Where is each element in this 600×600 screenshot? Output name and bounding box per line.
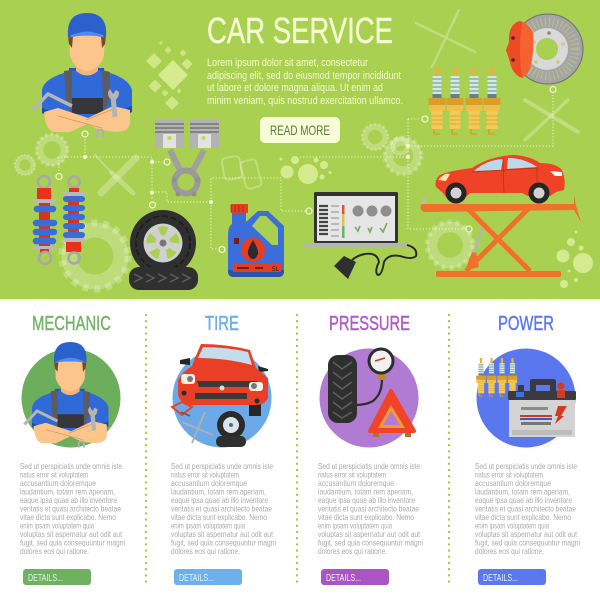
circle icon: mechanic — [22, 342, 120, 448]
button: tire details: DETAILS... — [179, 572, 214, 584]
text: mechanic: enim ipsam voluptatem quia — [20, 520, 94, 530]
heading: power: POWER — [498, 313, 554, 335]
text: power: vitae dicta sunt explicabo. Nemo — [475, 512, 571, 522]
text: pressure — [318, 461, 423, 556]
text: tire: eaque ipsa quae ab illo inventore — [171, 495, 268, 505]
title: CAR SERVICE — [207, 10, 393, 51]
button: tire details — [174, 569, 242, 585]
text: tire: dolores eos qui ratione. — [171, 546, 240, 556]
text: pressure: voluptas sit aspernatur aut odit aut — [318, 529, 421, 539]
text: power: eaque ipsa quae ab illo inventore — [475, 495, 572, 505]
intro text: ut labore et dolore magna aliqua. Ut enim ad — [207, 82, 383, 94]
circle icon: tire — [172, 344, 272, 448]
text: power: accusantium doloremque — [475, 478, 551, 488]
icon: scissor lift — [420, 195, 581, 277]
decorative diamonds — [146, 41, 192, 110]
text: power: natus error sit voluptatem — [475, 470, 543, 480]
text: mechanic: natus error sit voluptatem — [20, 470, 88, 480]
separators — [146, 315, 449, 587]
text: pressure: accusantium doloremque — [318, 478, 394, 488]
icon: oil canister: 5L — [272, 266, 280, 273]
text: mechanic: dolores eos qui ratione. — [20, 546, 89, 556]
text: mechanic: vitae dicta sunt explicabo. Nemo — [20, 512, 116, 522]
heading: tire: TIRE — [205, 313, 239, 335]
text: mechanic: laudantium, totam rem aperiam, — [20, 486, 115, 496]
faint tool silhouettes — [95, 10, 578, 193]
text: power: laudantium, totam rem aperiam, — [475, 486, 570, 496]
button: mechanic details: DETAILS... — [28, 572, 63, 584]
panel: mechanic — [20, 313, 125, 585]
panel: pressure — [318, 313, 423, 585]
text: pressure: veritatis et quasi architecto beatae — [318, 504, 419, 514]
circle icon: power — [476, 348, 576, 448]
text: tire: enim ipsam voluptatem quia — [171, 520, 245, 530]
text: tire: vitae dicta sunt explicabo. Nemo — [171, 512, 267, 522]
text: tire — [171, 461, 276, 556]
button: pressure details — [321, 569, 389, 585]
text: tire: accusantium doloremque — [171, 478, 247, 488]
decorative gears — [15, 124, 473, 289]
button: power details: DETAILS... — [483, 572, 518, 584]
text: mechanic: accusantium doloremque — [20, 478, 96, 488]
icon: wheel and tyre — [129, 210, 198, 290]
text: mechanic: eaque ipsa quae ab illo inventore — [20, 495, 117, 505]
text: mechanic: voluptas sit aspernatur aut odit aut — [20, 529, 123, 539]
text: tire: voluptas sit aspernatur aut odit aut — [171, 529, 274, 539]
text: power: veritatis et quasi architecto beatae — [475, 504, 576, 514]
text: pressure: fugit, sed quia consequuntur magni — [318, 538, 423, 548]
text: tire: Sed ut perspiciatis unde omnis iste — [171, 461, 273, 471]
text: mechanic: veritatis et quasi architecto beatae — [20, 504, 121, 514]
icon: mechanic — [33, 13, 132, 137]
text: mechanic: Sed ut perspiciatis unde omnis iste — [20, 461, 122, 471]
text: power: enim ipsam voluptatem quia — [475, 520, 549, 530]
icon: brake disc — [506, 14, 583, 84]
button: pressure details: DETAILS... — [326, 572, 361, 584]
panel: tire — [171, 313, 276, 585]
intro text: adipiscing elit, sed do eiusmod tempor incididunt — [207, 70, 401, 82]
text: pressure: vitae dicta sunt explicabo. Nemo — [318, 512, 414, 522]
connector lines — [56, 86, 556, 252]
icon: oil canister — [228, 204, 284, 277]
button: mechanic details — [23, 569, 91, 585]
text: power — [475, 461, 580, 556]
text: pressure: Sed ut perspiciatis unde omnis iste — [318, 461, 420, 471]
decorative bubbles — [280, 156, 593, 288]
text: tire: fugit, sed quia consequuntur magni — [171, 538, 276, 548]
heading: mechanic: MECHANIC — [32, 313, 111, 335]
text: power: dolores eos qui ratione. — [475, 546, 544, 556]
panel: power — [475, 313, 580, 585]
icon: shock absorbers — [33, 176, 85, 264]
text: pressure: dolores eos qui ratione. — [318, 546, 387, 556]
green banner background — [0, 0, 600, 300]
text: tire: natus error sit voluptatem — [171, 470, 239, 480]
text: pressure: natus error sit voluptatem — [318, 470, 386, 480]
text: pressure: enim ipsam voluptatem quia — [318, 520, 392, 530]
icon: pistons and connecting rods — [155, 120, 219, 196]
icon: laptop with diagnostics and cable — [304, 192, 416, 279]
icon: spark plugs — [428, 67, 500, 134]
intro text — [207, 57, 403, 107]
intro text: Lorem ipsum dolor sit amet, consectetur — [207, 57, 368, 69]
button: power details — [478, 569, 546, 585]
text: mechanic: fugit, sed quia consequuntur magni — [20, 538, 125, 548]
text: power: voluptas sit aspernatur aut odit aut — [475, 529, 578, 539]
intro text: minim veniam, quis nostrud exercitation ullamco. — [207, 95, 403, 107]
text: mechanic — [20, 461, 125, 556]
text: pressure: laudantium, totam rem aperiam, — [318, 486, 413, 496]
circle icon: pressure — [320, 348, 418, 448]
read more button: READ MORE — [270, 122, 330, 138]
read more button — [260, 117, 340, 143]
text: tire: laudantium, totam rem aperiam, — [171, 486, 266, 496]
heading: pressure: PRESSURE — [329, 313, 410, 335]
text: tire: veritatis et quasi architecto beatae — [171, 504, 272, 514]
icon: red car on lift — [436, 155, 565, 204]
text: pressure: eaque ipsa quae ab illo inventore — [318, 495, 415, 505]
